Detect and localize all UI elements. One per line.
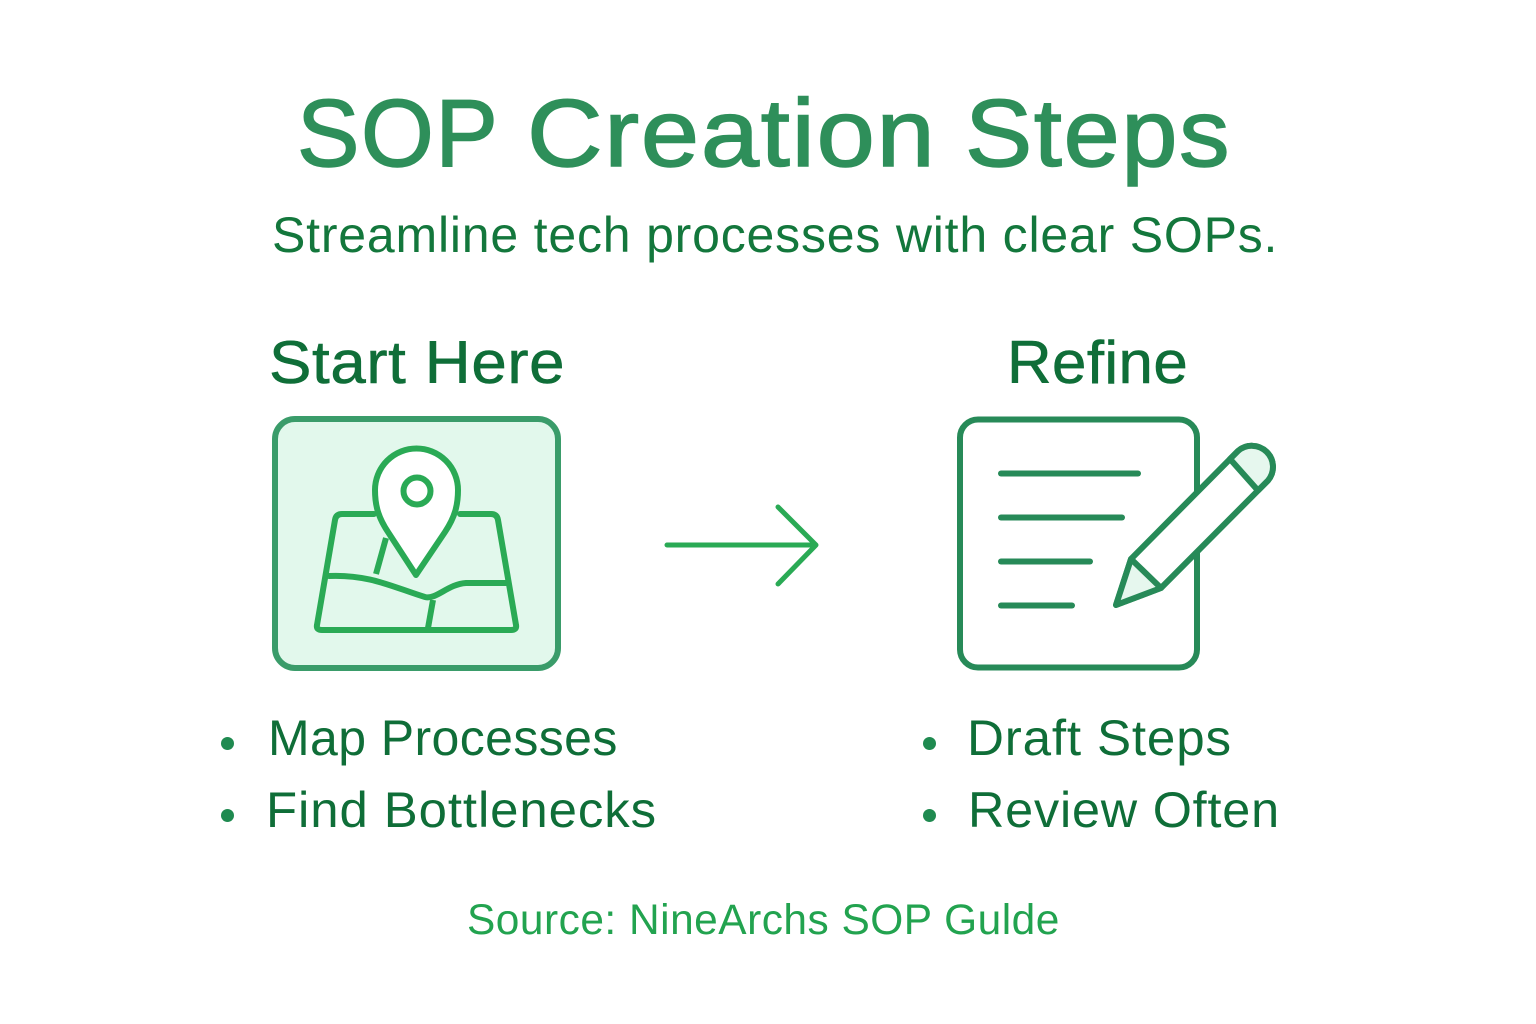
bullet item: draft steps: Draft Steps: [967, 710, 1232, 766]
subtitle: Streamline tech processes with clear SOPs.: [272, 207, 1278, 263]
heading: start here: Start Here: [269, 329, 565, 396]
bullet dot 3: [923, 737, 936, 750]
pencil eraser: [1230, 446, 1273, 490]
pencil body: [1116, 446, 1273, 605]
title: Steps: [965, 80, 1231, 187]
bullet list: start here: [221, 710, 657, 838]
bullet item: review often: Review Often: [968, 782, 1280, 838]
title: Creation: [527, 80, 936, 187]
source note: Source: NineArchs SOP Gulde: [467, 896, 1060, 944]
bullet item: find bottlenecks: Find Bottlenecks: [266, 782, 657, 838]
arrow: [664, 504, 818, 586]
icon: document with pencil: [957, 416, 1276, 670]
bullet item: map processes: Map Processes: [268, 710, 618, 766]
bullet dot 4: [923, 809, 936, 822]
bullet dot 2: [221, 809, 234, 822]
bullet list: refine: [923, 710, 1280, 838]
heading: refine: Refine: [1007, 329, 1188, 396]
pencil tip: [1116, 559, 1161, 605]
title: [297, 80, 1231, 187]
bullet dot 1: [221, 737, 234, 750]
icon: map with location pin: [272, 416, 561, 671]
title: SOP: [297, 80, 499, 187]
